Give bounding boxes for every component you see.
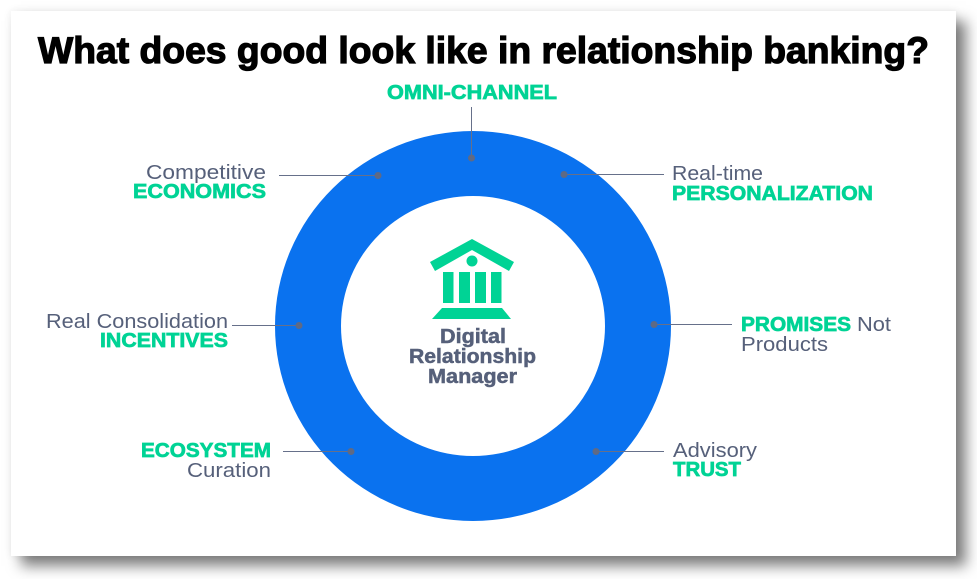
callout: Advisory Trust [592, 439, 758, 481]
blue ring [275, 131, 671, 521]
center label: Digital Relationship Manager [409, 326, 536, 388]
callout: Ecosystem Curation: ECOSYSTEM [141, 440, 271, 462]
callout: Competitive Economics: ECONOMICS [133, 181, 266, 203]
callout: Omni-channel: OMNI-CHANNEL [387, 82, 557, 104]
callout: Promises Not Products: Products [741, 333, 828, 356]
callout: Competitive Economics [133, 161, 382, 203]
callout: Real Consolidation Incentives: INCENTIVES [100, 330, 228, 352]
title: What does good look like in relationship banking? [38, 30, 929, 71]
callout: Promises Not Products: PROMISES [741, 314, 851, 336]
callout: Real-time Personalization: Real-time [672, 162, 763, 185]
callout: Real Consolidation Incentives: Real Consolidation [46, 310, 228, 333]
callout: Real-time Personalization [560, 162, 873, 205]
callout: Real Consolidation Incentives [46, 310, 302, 352]
center label: Digital Relationship Manager: Relationship [409, 346, 536, 368]
callout: Advisory Trust: Advisory [673, 439, 758, 462]
center label: Digital Relationship Manager: Manager [428, 366, 517, 388]
callout: Competitive Economics: Competitive [146, 161, 266, 184]
callout: Ecosystem Curation: Curation [187, 459, 271, 482]
callout: Promises Not Products: Not [857, 313, 891, 336]
callout: Ecosystem Curation [141, 440, 354, 482]
callout: Real-time Personalization: PERSONALIZATION [672, 183, 873, 205]
center label: Digital Relationship Manager: Digital [440, 326, 506, 348]
icon: bank building [430, 239, 514, 319]
callout: Omni-channel [387, 82, 557, 162]
callout: Promises Not Products [650, 313, 891, 356]
callout: Advisory Trust: TRUST [673, 459, 741, 481]
